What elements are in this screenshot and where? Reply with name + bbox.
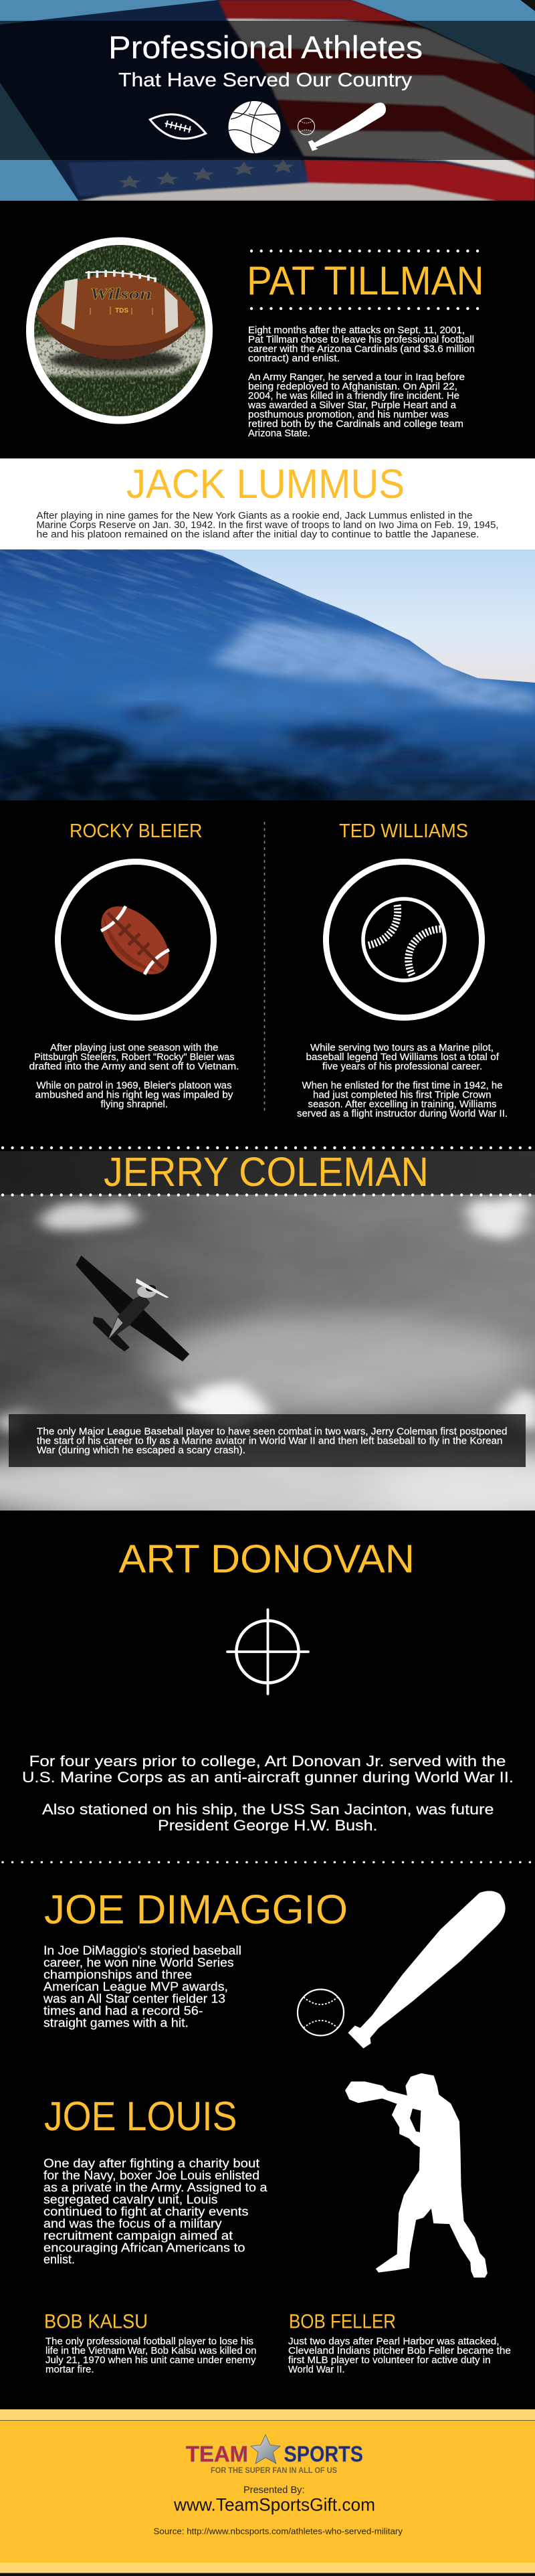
heading: Art Donovan: ART DONOVAN — [119, 1537, 415, 1581]
body text: posthumous promotion, and his number was — [248, 410, 449, 420]
panel: header — [0, 0, 535, 201]
panel: Joe Louis — [43, 2073, 487, 2278]
body text — [37, 1426, 507, 1456]
body text: Marine Corps Reserve on Jan. 30, 1942. In the first wave of troops to land on Iwo Jima on Feb. 19, 1945, — [36, 520, 499, 531]
body text: Cleveland Indians pitcher Bob Feller became the — [288, 2345, 511, 2356]
subtitle: That Have Served Our Country — [118, 70, 413, 91]
body text: ambushed and his right leg was impaled by — [35, 1090, 233, 1100]
heading: Jerry Coleman: JERRY COLEMAN — [104, 1149, 429, 1195]
sky behind wave — [201, 549, 535, 683]
body text: World War II. — [288, 2364, 345, 2375]
body text: War (during which he escaped a scary crash). — [37, 1444, 245, 1456]
body text: life in the Vietnam War, Bob Kalsu was killed on — [45, 2345, 257, 2356]
panel: footer — [0, 2409, 535, 2576]
body text: The only professional football player to lose his — [45, 2336, 253, 2347]
website: www.TeamSportsGift.com — [173, 2495, 375, 2515]
body text: After playing in nine games for the New York Giants as a rookie end, Jack Lummus enlisted in the — [36, 511, 472, 521]
icon: baseball bat — [308, 102, 386, 151]
body text — [36, 511, 499, 540]
ring — [58, 862, 214, 1017]
panel: Rocky Bleier — [29, 821, 239, 1110]
icon: basketball — [229, 101, 281, 153]
canton stars — [119, 159, 294, 188]
heading: Pat Tillman: PAT TILLMAN — [247, 258, 484, 303]
body text: times and had a record 56- — [43, 2004, 203, 2017]
body text: was awarded a Silver Star, Purple Heart and a — [247, 400, 457, 411]
body text: The only Major League Baseball player to have seen combat in two wars, Jerry Coleman first postponed — [37, 1426, 507, 1438]
body text: career, he won nine World Series — [43, 1956, 234, 1969]
body text: flying shrapnel. — [100, 1099, 168, 1110]
body text: first MLB player to volunteer for active duty in — [288, 2354, 491, 2366]
divider dots — [3, 1148, 535, 1195]
body text: baseball legend Ted Williams lost a total of — [306, 1052, 500, 1063]
presented by: Presented By: — [243, 2484, 305, 2496]
panel: Art Donovan — [22, 1537, 514, 1834]
body text — [43, 2156, 268, 2266]
body text — [288, 2336, 511, 2375]
water texture — [0, 549, 387, 653]
logo: Team Sports: TEAM — [186, 2441, 248, 2466]
body text: segregated cavalry unit, Louis — [43, 2193, 218, 2206]
body text: While serving two tours as a Marine pilot, — [310, 1043, 494, 1053]
body text: When he enlisted for the first time in 1942, he — [302, 1080, 503, 1091]
icon: airplane — [76, 1256, 189, 1361]
body text: enlist. — [43, 2253, 75, 2266]
body text — [43, 1944, 241, 2029]
ring — [326, 862, 481, 1017]
dark heading band — [0, 1151, 535, 1195]
body text — [247, 325, 475, 439]
icon: football — [89, 894, 181, 986]
heading: Bob Feller: BOB FELLER — [289, 2310, 396, 2333]
panel: Joe DiMaggio — [43, 1887, 506, 2049]
body text: encouraging African Americans to — [43, 2241, 245, 2254]
body text: Arizona State. — [248, 428, 310, 439]
body text: the start of his career to fly as a Marine aviator in World War II and then left baseball to fly in the Korean — [37, 1435, 503, 1447]
icon: boxer silhouette — [346, 2073, 487, 2278]
body text: Eight months after the attacks on Sept. 11, 2001, — [248, 325, 465, 336]
heading: Jack Lummus: JACK LUMMUS — [126, 461, 405, 507]
heading: Joe DiMaggio: JOE DIMAGGIO — [44, 1887, 348, 1932]
photo: football on field: Wilson — [90, 286, 152, 303]
panel: Jerry Coleman — [0, 1148, 535, 1528]
body text: For four years prior to college, Art Donovan Jr. served with the — [29, 1753, 506, 1770]
body text — [22, 1753, 514, 1834]
heading: Bob Kalsu: BOB KALSU — [44, 2310, 148, 2333]
divider dots — [251, 251, 484, 309]
body text: being redeployed to Afghanistan. On April 22, — [248, 381, 457, 392]
body text: Pat Tillman chose to leave his professional football — [248, 335, 474, 345]
body text: straight games with a hit. — [43, 2016, 189, 2029]
body text: Pittsburgh Steelers, Robert "Rocky" Bleier was — [34, 1052, 234, 1063]
body text: as a private in the Army. Assigned to a — [43, 2180, 268, 2194]
body text — [297, 1043, 508, 1119]
panel: Bob Kalsu — [44, 2310, 257, 2375]
body text: retired both by the Cardinals and college team — [248, 419, 463, 430]
title: Professional Athletes — [108, 29, 423, 65]
body text — [45, 2336, 257, 2375]
body text: served as a flight instructor during World War II. — [297, 1108, 508, 1119]
body text: While on patrol in 1969, Bleier's platoon was — [36, 1080, 231, 1091]
body text: five years of his professional career. — [322, 1061, 482, 1072]
body text: and was the focus of a military — [43, 2217, 222, 2230]
body text: drafted into the Army and sent off to Vietnam. — [29, 1061, 239, 1072]
heading: Joe Louis: JOE LOUIS — [44, 2093, 237, 2139]
panel: Ted Williams — [297, 821, 508, 1119]
body text: was an All Star center fielder 13 — [43, 1992, 225, 2005]
photo: football on field: TDS — [115, 307, 128, 315]
body text: President George H.W. Bush. — [158, 1817, 377, 1834]
panel: Jack Lummus — [0, 458, 535, 549]
dark title band — [0, 21, 535, 160]
body text: career with the Arizona Cardinals (and $3.6 million — [248, 344, 475, 355]
icon: crosshair — [227, 1610, 308, 1694]
body text: season. After excelling in training, Williams — [308, 1099, 496, 1110]
body text — [29, 1043, 239, 1110]
body text: U.S. Marine Corps as an anti-aircraft gunner during World War II. — [22, 1769, 514, 1786]
body text: contract) and enlist. — [248, 353, 340, 364]
body text: continued to fight at charity events — [43, 2205, 249, 2218]
logo: Team Sports: FOR THE SUPER FAN IN ALL OF US — [211, 2466, 337, 2475]
body text: Just two days after Pearl Harbor was attacked, — [288, 2336, 499, 2347]
heading: Rocky Bleier: ROCKY BLEIER — [70, 821, 202, 842]
body text: he and his platoon remained on the island after the initial day to continue to battle the Japanese. — [36, 529, 479, 540]
text panel — [9, 1414, 526, 1467]
heading: Ted Williams: TED WILLIAMS — [339, 821, 468, 842]
body text: July 21, 1970 when his unit came under enemy — [45, 2354, 256, 2366]
icon: small baseball — [298, 118, 314, 135]
body text: championships and three — [43, 1968, 192, 1981]
icon: baseball — [363, 899, 445, 980]
panel: Pat Tillman — [26, 237, 484, 439]
photo: ocean wave — [0, 549, 535, 800]
flag photo background — [0, 0, 535, 201]
body text: had just completed his first Triple Crown — [313, 1090, 491, 1100]
icon: football outline — [148, 113, 207, 140]
body text: In Joe DiMaggio's storied baseball — [43, 1944, 241, 1957]
photo: sky with clouds — [0, 1149, 535, 1528]
body text: 2004, he was killed in a friendly fire incident. He — [248, 391, 459, 402]
body text: recruitment campaign aimed at — [43, 2229, 233, 2242]
panel: Bob Feller — [288, 2310, 511, 2375]
body text: mortar fire. — [45, 2364, 94, 2375]
body text: One day after fighting a charity bout — [43, 2156, 259, 2170]
source: Source: http://www.nbcsports.com/athletes-who-served-military — [154, 2526, 403, 2537]
icon: baseball bat — [348, 1891, 506, 2049]
logo: Team Sports: SPORTS — [284, 2441, 363, 2466]
body text: After playing just one season with the — [50, 1043, 218, 1053]
body text: Also stationed on his ship, the USS San Jacinton, was future — [42, 1801, 494, 1818]
body text: An Army Ranger, he served a tour in Iraq before — [248, 372, 465, 383]
body text: for the Navy, boxer Joe Louis enlisted — [43, 2168, 259, 2182]
photo: football on field — [26, 237, 213, 424]
logo: Team Sports — [186, 2435, 363, 2475]
icon: baseball — [298, 1989, 344, 2036]
body text: American League MVP awards, — [43, 1980, 228, 1993]
